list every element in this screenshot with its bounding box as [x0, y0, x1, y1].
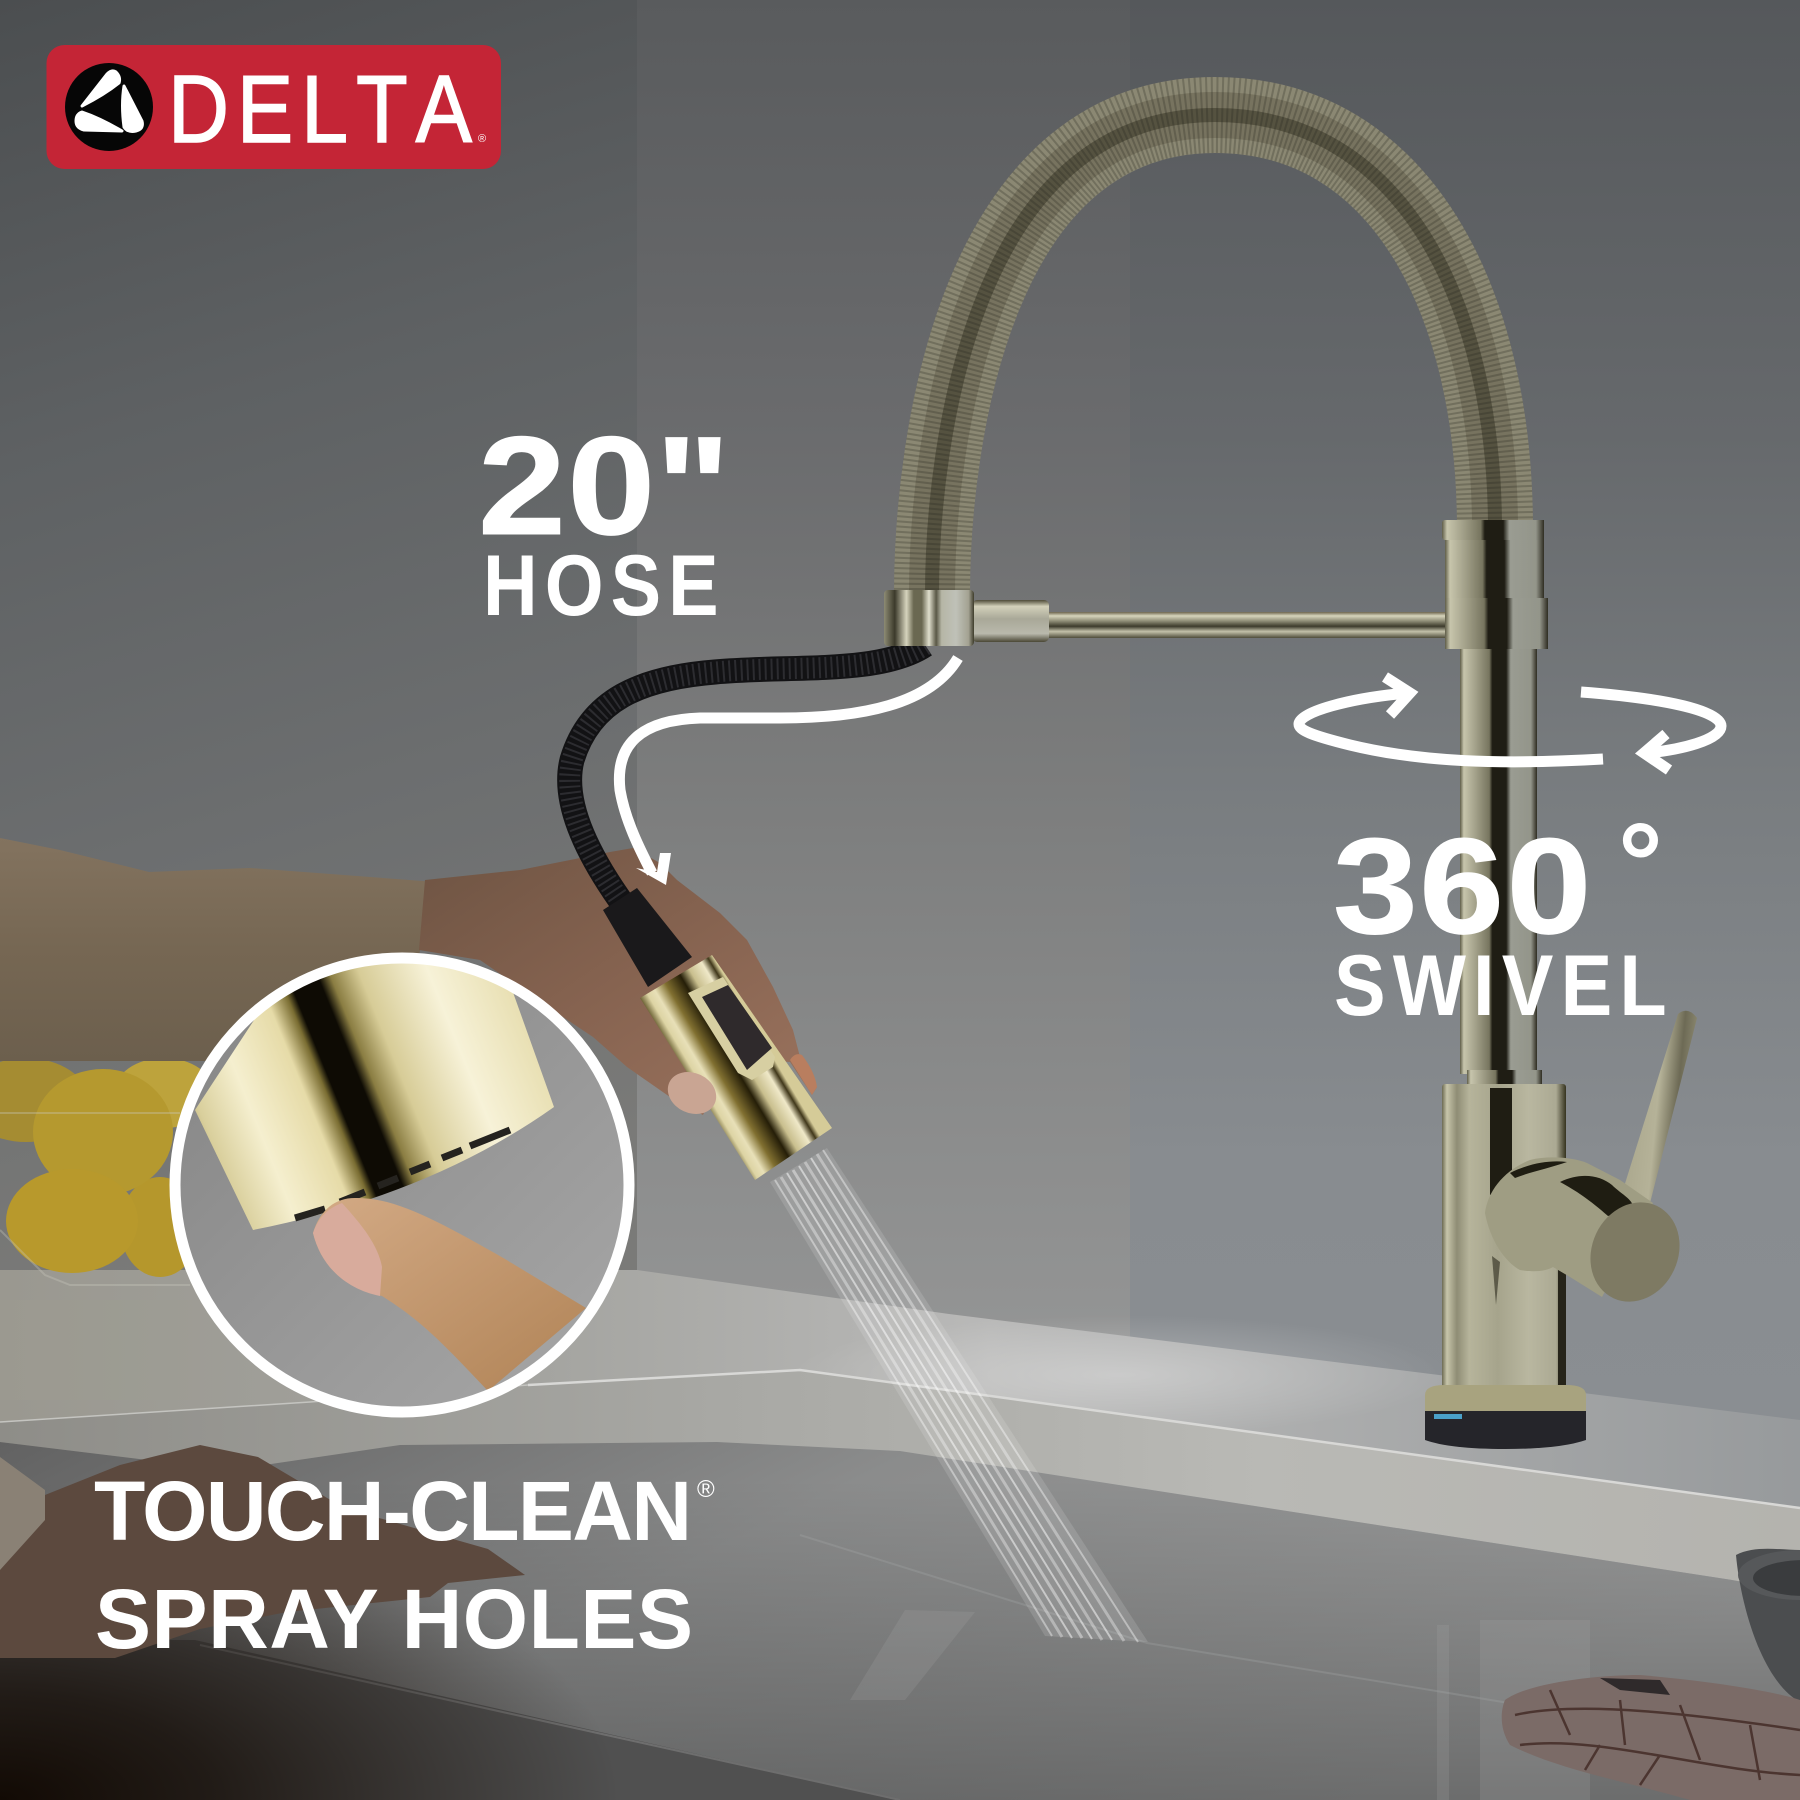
water spray — [770, 1148, 1148, 1642]
handle face — [1574, 1188, 1696, 1316]
hose length label: 20" — [478, 407, 730, 564]
touch-clean label: ® — [697, 1476, 715, 1503]
logo badge: ® — [478, 133, 486, 145]
logo mark — [65, 63, 153, 151]
fingernail — [313, 1203, 382, 1296]
touch-clean label — [94, 1464, 715, 1666]
hose head — [884, 590, 974, 646]
arrow: swivel rotation — [1299, 677, 1721, 770]
finger — [313, 1198, 586, 1391]
swivel label: SWIVEL — [1334, 938, 1674, 1034]
deck plate — [1425, 1385, 1586, 1412]
logo badge — [46, 45, 501, 169]
spring arch — [932, 115, 1495, 595]
handle neck — [1485, 1157, 1653, 1297]
handle lever — [1623, 1011, 1697, 1203]
arrow: along hose — [619, 658, 958, 885]
swivel label: ° — [1618, 800, 1663, 925]
arm sleeve — [0, 838, 436, 1061]
towel — [1502, 1675, 1800, 1800]
hose — [570, 645, 925, 900]
LED indicator — [1434, 1414, 1462, 1419]
spray holes — [295, 1130, 510, 1218]
inset circle: touch-clean spray holes — [174, 950, 630, 1413]
swivel label — [1333, 800, 1674, 1034]
cross arm — [1049, 612, 1467, 638]
top collar — [1445, 520, 1544, 600]
bowl — [1736, 1549, 1800, 1702]
faucet — [884, 115, 1697, 1449]
countertop and sink — [0, 1270, 1800, 1800]
swivel label: 360 — [1333, 810, 1591, 962]
touch-clean label: SPRAY HOLES — [95, 1572, 693, 1666]
hose length label — [478, 407, 730, 634]
fingertip — [790, 1054, 817, 1095]
handle reflection — [1510, 1161, 1567, 1178]
hose length label: HOSE — [483, 539, 726, 634]
logo wordmark: DELTA — [168, 56, 480, 163]
nozzle — [195, 950, 554, 1230]
touch-clean label: TOUCH-CLEAN — [94, 1464, 692, 1558]
hand holding sprayer — [419, 848, 817, 1115]
base cylinder — [1442, 1084, 1566, 1396]
sprayer — [603, 888, 832, 1180]
post — [1460, 649, 1537, 1074]
fruit bowl with lemons — [0, 1058, 214, 1400]
lower hand and sleeve — [0, 1445, 525, 1658]
